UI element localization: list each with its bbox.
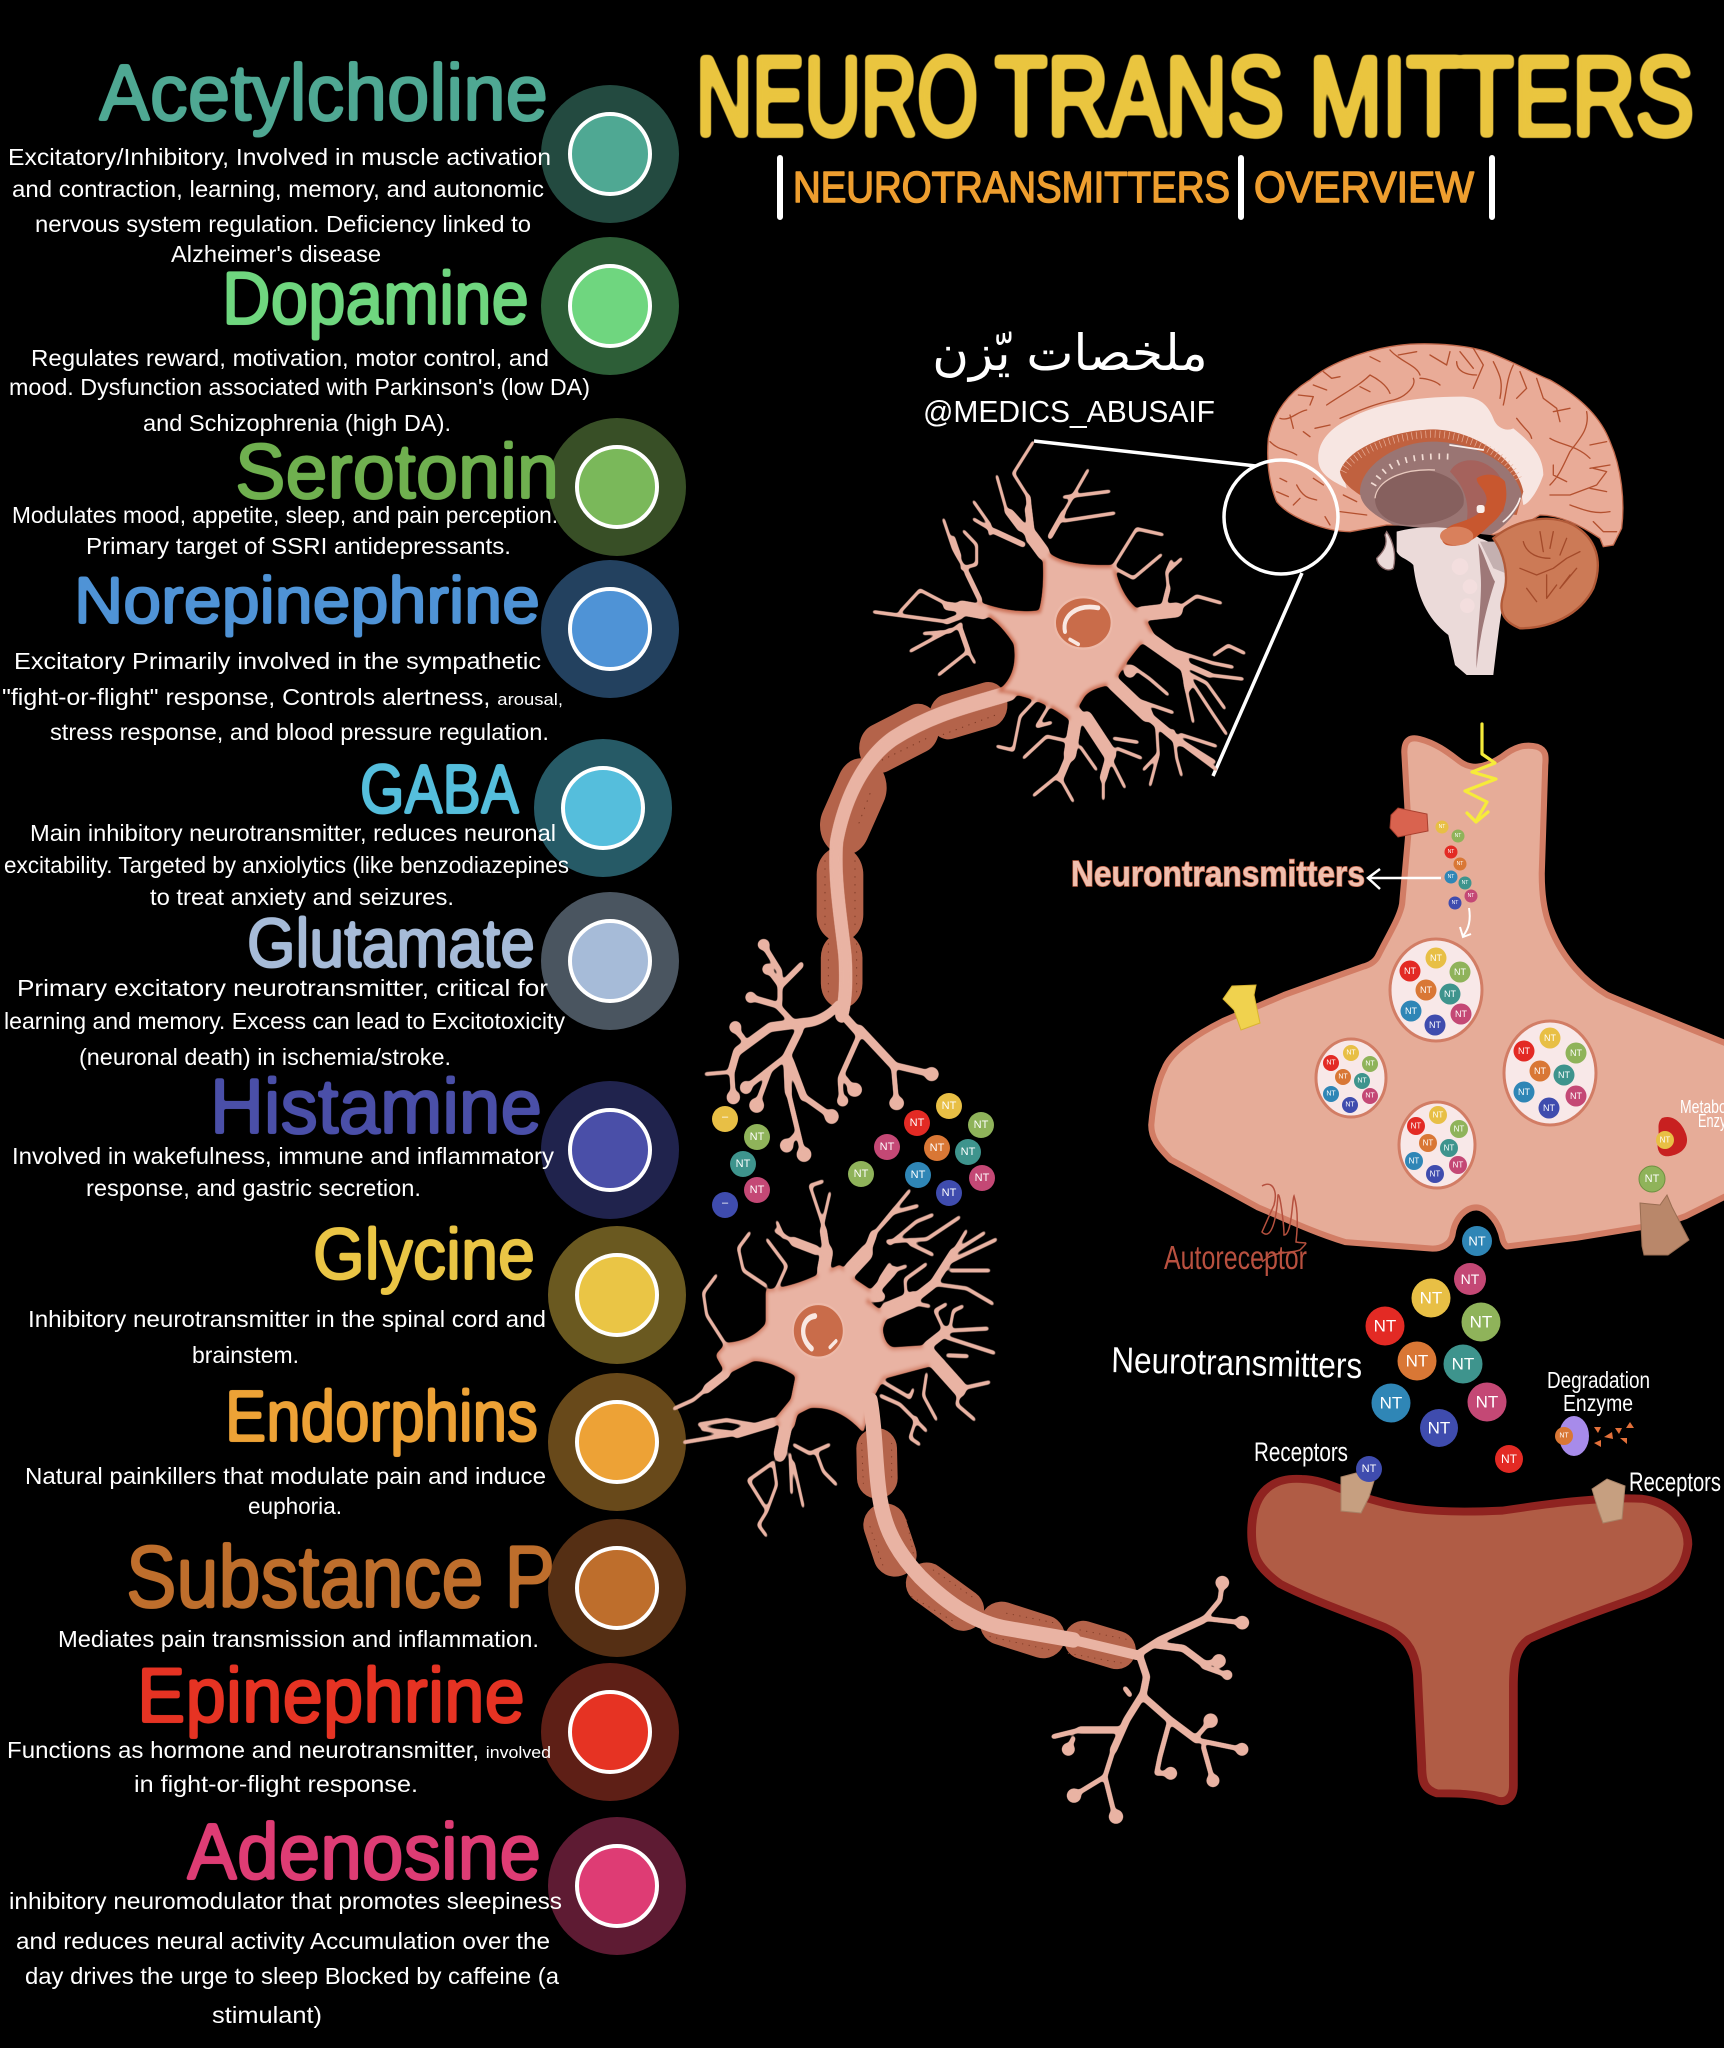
- vesicle 1: NT: [1404, 966, 1416, 976]
- icon: Glutamate dot: [541, 892, 679, 1030]
- bound neurotransmitter: NT: [1362, 1463, 1377, 1475]
- text: Endorphins description: euphoria.: [248, 1493, 342, 1519]
- text: Dopamine description: mood. Dysfunction associated with Parkinson's (low DA): [9, 374, 590, 400]
- credit: author name in Arabic: ملخصات يّزن: [932, 324, 1208, 382]
- icon: Substance P dot: [548, 1519, 686, 1657]
- neurotransmitters in axon: [1436, 820, 1478, 910]
- text: Serotonin description: Modulates mood, appetite, sleep, and pain perception.: [12, 502, 558, 528]
- mauve interior: [1360, 442, 1522, 535]
- vesicle 3: [1504, 1021, 1596, 1125]
- heading: Glutamate: Glutamate: [247, 904, 535, 982]
- vesicle 2: NT: [1326, 1090, 1336, 1098]
- text: Norepinephrine description: stress response, and blood pressure regulation.: [50, 719, 549, 745]
- ion channel: [1390, 808, 1428, 837]
- text: Adenosine description: day drives the urge to sleep Blocked by caffeine (a: [25, 1963, 559, 1989]
- neurotransmitters in axon: NT: [1448, 874, 1454, 880]
- text: GABA description: Main inhibitory neurotransmitter, reduces neuronal: [30, 820, 556, 846]
- free neurotransmitters between neurons: NT: [942, 1187, 957, 1199]
- free neurotransmitters between neurons: NT: [974, 1119, 989, 1131]
- text: Glutamate description: (neuronal death) in ischemia/stroke.: [79, 1044, 451, 1070]
- axon terminal of neuron 1: [705, 939, 939, 1162]
- label: Neurotransmitters: Neurotransmitters: [1111, 1339, 1363, 1386]
- text: Glycine description: Inhibitory neurotransmitter in the spinal cord and: [28, 1306, 546, 1332]
- vesicle 3: NT: [1570, 1091, 1582, 1101]
- receptor: right: [1592, 1479, 1625, 1523]
- text: Histamine description: Involved in wakefulness, immune and inflammatory: [12, 1143, 555, 1169]
- membrane body: [1151, 738, 1724, 1249]
- panel: Acetylcholine: [8, 48, 679, 267]
- text: Endorphins description: Natural painkillers that modulate pain and induce: [25, 1463, 546, 1489]
- panel: Histamine: [12, 1062, 679, 1219]
- vesicle 3: NT: [1558, 1070, 1570, 1080]
- synaptic cleft neurotransmitters: [1366, 1226, 1523, 1473]
- icon: Norepinephrine dot: [541, 560, 679, 698]
- text: Acetylcholine description: [8, 144, 551, 267]
- synaptic cleft neurotransmitters: NT: [1501, 1452, 1518, 1466]
- heading: Dopamine: Dopamine: [222, 256, 529, 340]
- thalamus: [1375, 470, 1464, 525]
- text: Norepinephrine description: "fight-or-flight" response, Controls alertness, arousal,: [2, 684, 563, 710]
- panel: GABA: [4, 739, 672, 910]
- text: Epinephrine description: Functions as hormone and neurotransmitter, involved: [7, 1737, 551, 1763]
- vesicle 4: NT: [1453, 1160, 1463, 1170]
- degradation enzyme: Enzyme: [1563, 1390, 1633, 1416]
- neurotransmitters in axon: NT: [1448, 849, 1454, 855]
- vesicle 2: NT: [1365, 1060, 1375, 1068]
- neuron 2: [673, 1181, 997, 1536]
- orange pons structure: [1442, 475, 1506, 546]
- free neurotransmitters between neurons: NT: [750, 1131, 765, 1143]
- free neurotransmitters between neurons: NT: [961, 1146, 976, 1158]
- neuron 1: [825, 442, 1245, 1015]
- text: Acetylcholine description: Alzheimer's disease: [171, 241, 381, 267]
- heading: Substance P: Substance P: [126, 1527, 555, 1626]
- icon: Acetylcholine dot: [541, 85, 679, 223]
- text: Acetylcholine description: nervous system regulation. Deficiency linked to: [35, 211, 531, 237]
- heading: Epinephrine: Epinephrine: [137, 1651, 525, 1739]
- degradation enzyme: [1547, 1367, 1650, 1456]
- free neurotransmitters between neurons: NT: [975, 1172, 990, 1184]
- synaptic cleft neurotransmitters: NT: [1452, 1354, 1474, 1374]
- heading: Histamine: Histamine: [210, 1062, 542, 1150]
- autoreceptor: [1164, 1184, 1307, 1276]
- vesicle 1: NT: [1405, 1006, 1417, 1016]
- icon: Serotonin dot: [548, 418, 686, 556]
- vesicle 3: NT: [1543, 1103, 1555, 1113]
- free neurotransmitters between neurons: NT: [911, 1169, 926, 1181]
- icon: electrical impulse: [1465, 724, 1496, 822]
- sulci: [1270, 348, 1617, 532]
- synaptic cleft neurotransmitters: NT: [1461, 1271, 1480, 1287]
- synaptic cleft neurotransmitters: NT: [1476, 1392, 1498, 1412]
- neurotransmitters in axon: NT: [1462, 880, 1468, 886]
- text: Serotonin description: Primary target of SSRI antidepressants.: [86, 533, 511, 559]
- vesicle 4: [1399, 1102, 1475, 1188]
- vesicle 1: NT: [1454, 967, 1466, 977]
- panel: Adenosine: [9, 1807, 686, 2028]
- brain illustration: [1268, 344, 1623, 675]
- neurotransmitters in axon: NT: [1457, 861, 1463, 867]
- small curved arrow: [1460, 908, 1471, 937]
- free neurotransmitters between neurons: –: [722, 1197, 729, 1209]
- free neurotransmitters between neurons: –: [722, 1111, 729, 1123]
- free neurotransmitters between neurons: NT: [910, 1117, 925, 1129]
- text: Norepinephrine description: Excitatory Primarily involved in the sympathetic: [14, 648, 541, 674]
- cortex: [1268, 344, 1623, 547]
- vesicle 3: NT: [1544, 1033, 1556, 1043]
- vesicle 3: NT: [1534, 1066, 1546, 1076]
- receptor: left: [1341, 1473, 1374, 1513]
- presynaptic terminal: [1151, 724, 1724, 1276]
- vesicle 2: NT: [1365, 1092, 1375, 1100]
- title: NEURO: [696, 34, 978, 159]
- metabolic enzyme: [1656, 1097, 1724, 1156]
- axon: [870, 1400, 1073, 1640]
- vesicle 4: NT: [1444, 1144, 1454, 1152]
- vesicle 3: NT: [1570, 1048, 1582, 1058]
- postsynaptic terminal: [1252, 1456, 1688, 1801]
- autoreceptor: Autoreceptor: [1164, 1239, 1307, 1276]
- icon: Epinephrine dot: [541, 1663, 679, 1801]
- heading: Adenosine: Adenosine: [187, 1807, 541, 1896]
- text: Epinephrine description: in fight-or-flight response.: [134, 1771, 418, 1797]
- vesicle 4: NT: [1430, 1170, 1440, 1178]
- text: GABA description: excitability. Targeted by anxiolytics (like benzodiazepines: [4, 852, 569, 878]
- text: GABA description: to treat anxiety and seizures.: [150, 884, 454, 910]
- receptor: yellow: [1223, 985, 1260, 1030]
- vesicle 1: NT: [1429, 1020, 1441, 1030]
- neurotransmitters in axon: NT: [1439, 824, 1445, 830]
- vesicle 1: NT: [1430, 953, 1442, 963]
- icon: Glycine dot: [548, 1226, 686, 1364]
- vesicle 1: NT: [1420, 985, 1432, 995]
- heading: Serotonin: Serotonin: [235, 427, 559, 515]
- axon of neuron 2 with terminal: [862, 1400, 1249, 1824]
- neurotransmitters in axon: NT: [1455, 833, 1461, 839]
- free neurotransmitters between neurons: NT: [750, 1184, 765, 1196]
- icon: Endorphins dot: [548, 1373, 686, 1511]
- vesicle 2: [1316, 1039, 1386, 1117]
- bound neurotransmitter: [1356, 1456, 1382, 1482]
- free neurotransmitters between neurons: NT: [942, 1100, 957, 1112]
- text: Dopamine description: [9, 345, 590, 436]
- neurotransmitters in axon: NT: [1452, 900, 1458, 906]
- terminal branches: [1053, 1576, 1249, 1824]
- arrow to label: [1368, 869, 1441, 889]
- white matter: [1318, 397, 1543, 505]
- vesicle 1: NT: [1444, 989, 1456, 999]
- vesicle 4: NT: [1433, 1110, 1443, 1120]
- neurotransmitters in axon: NT: [1468, 893, 1474, 899]
- text: Glutamate description: Primary excitatory neurotransmitter, critical for: [17, 975, 548, 1001]
- vesicle 2: NT: [1345, 1102, 1355, 1108]
- free neurotransmitters between neurons: NT: [854, 1168, 869, 1180]
- heading: Endorphins: Endorphins: [225, 1377, 538, 1457]
- vesicle 4: NT: [1423, 1138, 1433, 1148]
- heading: GABA: GABA: [360, 750, 519, 828]
- panel: Glycine: [28, 1215, 686, 1368]
- text: Endorphins description: [25, 1463, 546, 1519]
- reuptake neurotransmitter: [1639, 1166, 1665, 1192]
- text: Acetylcholine description: and contraction, learning, memory, and autonomic: [12, 176, 544, 202]
- free neurotransmitters between neurons: [712, 1093, 995, 1218]
- credit: handle: @MEDICS_ABUSAIF: [923, 394, 1215, 429]
- vesicle 4: NT: [1411, 1122, 1421, 1130]
- heading: Acetylcholine: Acetylcholine: [99, 48, 548, 137]
- heading: Norepinephrine: Norepinephrine: [74, 563, 540, 637]
- text: Glycine description: [28, 1306, 546, 1368]
- text: Adenosine description: [9, 1888, 562, 2028]
- text: Glycine description: brainstem.: [192, 1342, 299, 1368]
- text: Glutamate description: learning and memory. Excess can lead to Excitotoxicity: [4, 1008, 565, 1034]
- title: TRANS: [995, 34, 1284, 159]
- subtitle: [780, 158, 1492, 217]
- nucleus: [793, 1304, 844, 1358]
- metabolic enzyme: NT: [1660, 1136, 1670, 1144]
- text: Adenosine description: stimulant): [212, 2002, 322, 2028]
- zoom callout: circle and lines: [1034, 441, 1338, 776]
- icon: Adenosine dot: [548, 1817, 686, 1955]
- text: Epinephrine description: [7, 1737, 551, 1797]
- axon, soma and dendrites: [836, 442, 1245, 1015]
- text: Glutamate description: [4, 975, 565, 1070]
- vesicle 2: NT: [1326, 1060, 1336, 1066]
- text: Acetylcholine description: Excitatory/Inhibitory, Involved in muscle activation: [8, 144, 551, 170]
- synaptic cleft neurotransmitters: NT: [1470, 1312, 1492, 1332]
- cerebellum: [1493, 519, 1598, 628]
- vesicle 2: NT: [1346, 1050, 1356, 1056]
- subtitle: NEUROTRANSMITTERS: [793, 163, 1230, 212]
- vesicle 2: NT: [1357, 1078, 1367, 1084]
- label: Neurontransmitters: Neurontransmitters: [1071, 853, 1365, 894]
- text: Histamine description: [12, 1143, 555, 1201]
- text: Adenosine description: inhibitory neuromodulator that promotes sleepiness: [9, 1888, 562, 1914]
- subtitle: OVERVIEW: [1254, 163, 1474, 212]
- panel: Serotonin: [12, 418, 686, 559]
- synaptic cleft neurotransmitters: NT: [1468, 1234, 1486, 1248]
- vesicle 1: [1390, 939, 1482, 1041]
- synaptic cleft neurotransmitters: NT: [1406, 1352, 1428, 1370]
- text: Substance P description: Mediates pain transmission and inflammation.: [58, 1626, 539, 1652]
- synaptic cleft neurotransmitters: NT: [1420, 1288, 1442, 1308]
- nucleus: [1055, 597, 1112, 649]
- icon: Dopamine dot: [541, 237, 679, 375]
- synaptic cleft neurotransmitters: NT: [1428, 1418, 1450, 1438]
- panel: Dopamine: [9, 237, 679, 436]
- vesicle 1: NT: [1455, 1009, 1467, 1019]
- text: Histamine description: response, and gastric secretion.: [86, 1175, 421, 1201]
- vesicle 3: NT: [1518, 1046, 1530, 1056]
- vesicle 2: NT: [1338, 1074, 1348, 1080]
- soma and dendrites: [673, 1181, 997, 1536]
- text: GABA description: [4, 820, 569, 910]
- synaptic cleft neurotransmitters: NT: [1380, 1394, 1402, 1412]
- text: Adenosine description: and reduces neural activity Accumulation over the: [16, 1928, 550, 1954]
- cingulate band: [1340, 429, 1523, 515]
- free neurotransmitters between neurons: NT: [930, 1142, 945, 1154]
- vesicle 4: NT: [1409, 1156, 1419, 1166]
- icon: GABA dot: [534, 739, 672, 877]
- panel: Substance P: [58, 1519, 686, 1657]
- reuptake transporter: [1640, 1195, 1689, 1255]
- free neurotransmitters between neurons: NT: [880, 1141, 895, 1153]
- brainstem: [1397, 527, 1510, 675]
- text: Serotonin description: [12, 502, 558, 559]
- heading: Glycine: Glycine: [313, 1215, 535, 1295]
- myelin sheath: [825, 705, 997, 995]
- panel: Endorphins: [25, 1373, 686, 1519]
- degradation enzyme: NT: [1559, 1432, 1569, 1440]
- panel: Norepinephrine: [2, 560, 679, 745]
- synaptic cleft neurotransmitters: NT: [1374, 1316, 1396, 1336]
- vesicle 4: NT: [1454, 1124, 1464, 1134]
- reuptake neurotransmitter: NT: [1645, 1173, 1660, 1185]
- label: Receptors left: Receptors: [1254, 1437, 1348, 1467]
- free neurotransmitters between neurons: NT: [736, 1158, 751, 1170]
- text: Dopamine description: Regulates reward, motivation, motor control, and: [31, 345, 549, 371]
- text: Dopamine description: and Schizophrenia (high DA).: [143, 410, 451, 436]
- degradation enzyme: Degradation: [1547, 1367, 1650, 1393]
- panel: Epinephrine: [7, 1651, 679, 1801]
- panel: Glutamate: [4, 892, 679, 1070]
- myelin sheath: [862, 1443, 1130, 1663]
- vesicle 3: NT: [1518, 1087, 1530, 1097]
- text: Norepinephrine description: [2, 648, 563, 745]
- icon: Histamine dot: [541, 1081, 679, 1219]
